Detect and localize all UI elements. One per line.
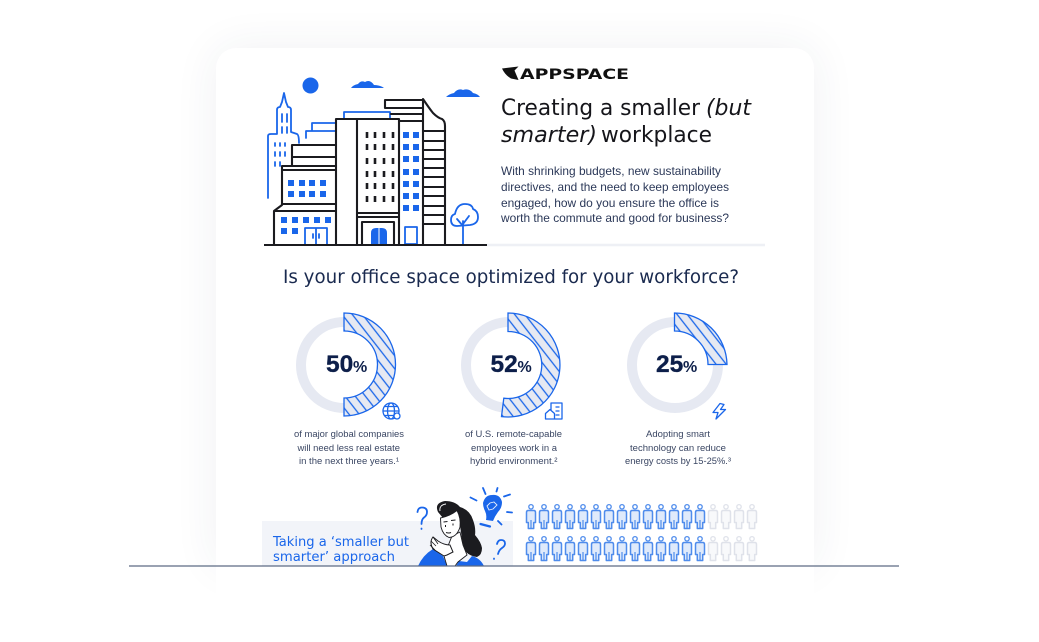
value: % xyxy=(683,359,697,376)
heading: Taking a ‘smaller but xyxy=(272,535,409,550)
chart: 50 percent donut xyxy=(294,313,404,467)
title: Creating a smaller xyxy=(501,96,701,121)
intro text block xyxy=(500,164,729,225)
value xyxy=(490,351,532,378)
left building windows xyxy=(281,180,331,234)
value: % xyxy=(518,359,532,376)
caption: technology can reduce xyxy=(630,443,726,454)
main entrance door xyxy=(371,228,387,244)
face details xyxy=(444,520,456,533)
right tower xyxy=(423,99,445,244)
value: % xyxy=(353,359,367,376)
blue rooftop outlines xyxy=(306,112,390,138)
panel: infographic card xyxy=(216,48,814,566)
blue windows of rear tower xyxy=(403,132,419,211)
lightbulb rays xyxy=(470,488,512,524)
value: 25 xyxy=(656,351,683,378)
intro text block: directives, and the need to keep employees xyxy=(501,180,729,194)
icon: globe with pin xyxy=(383,403,400,419)
right shirt xyxy=(456,556,484,566)
caption: of major global companies xyxy=(294,429,404,440)
logo: Appspace: APPSPACE xyxy=(520,67,629,83)
hair highlight xyxy=(440,504,446,511)
value: 50 xyxy=(326,351,353,378)
blue skyscraper in the background xyxy=(268,93,299,198)
value: 52 xyxy=(490,351,518,378)
pictogram: people row 2 xyxy=(526,537,756,560)
title: workplace xyxy=(601,123,712,148)
icon: logo mark xyxy=(502,66,518,80)
caption xyxy=(465,429,562,467)
left building xyxy=(274,145,336,244)
caption: Adopting smart xyxy=(646,429,710,440)
intro text block: worth the commute and good for business? xyxy=(500,211,729,225)
title: (but xyxy=(706,96,752,121)
heading xyxy=(272,535,409,565)
value xyxy=(326,351,367,378)
illustration: city buildings xyxy=(264,78,487,245)
main tower windows xyxy=(366,132,394,202)
illustration: thinking woman with lightbulb xyxy=(418,488,512,566)
right question mark xyxy=(494,540,505,559)
caption xyxy=(625,429,731,467)
icon: tree xyxy=(451,204,478,244)
caption: will need less real estate xyxy=(297,443,400,454)
icon: sun xyxy=(302,78,318,94)
left question mark xyxy=(418,508,427,529)
intro text block: engaged, how do you ensure the office is xyxy=(501,196,719,210)
baseline rule xyxy=(129,565,899,567)
icon: lightning bolt xyxy=(713,404,726,419)
neck xyxy=(444,532,467,566)
finger lines xyxy=(430,537,438,550)
value xyxy=(656,351,697,378)
hair xyxy=(437,501,482,557)
panel: smaller but smarter approach xyxy=(262,521,513,566)
chart: 52 percent donut xyxy=(465,313,562,467)
caption xyxy=(294,429,404,467)
icon: cloud left xyxy=(351,81,384,88)
lightbulb xyxy=(483,495,502,521)
face xyxy=(440,510,460,538)
rear tower door xyxy=(405,227,417,244)
left sleeve xyxy=(418,549,447,566)
main tower xyxy=(336,119,399,244)
title xyxy=(501,96,752,148)
caption: of U.S. remote-capable xyxy=(465,429,562,440)
hand xyxy=(431,537,453,556)
caption: employees work in a xyxy=(471,443,558,454)
rear tower floors xyxy=(385,100,423,121)
title: smarter) xyxy=(501,123,597,148)
icon: cloud right xyxy=(446,89,480,97)
caption: energy costs by 15-25%.³ xyxy=(625,456,731,467)
left building door xyxy=(305,228,327,244)
intro text block: With shrinking budgets, new sustainability xyxy=(501,164,721,178)
chart: 25 percent donut xyxy=(625,313,731,467)
ground line xyxy=(264,244,487,246)
caption: in the next three years.¹ xyxy=(299,456,399,467)
caption: hybrid environment.² xyxy=(470,456,558,467)
heading: office space question: Is your office space optimized for your workforce? xyxy=(283,266,739,288)
pictogram: people row 1 xyxy=(526,505,756,528)
logo: Appspace xyxy=(502,66,629,83)
heading: smarter’ approach xyxy=(273,550,395,565)
icon: house and building xyxy=(546,403,562,419)
